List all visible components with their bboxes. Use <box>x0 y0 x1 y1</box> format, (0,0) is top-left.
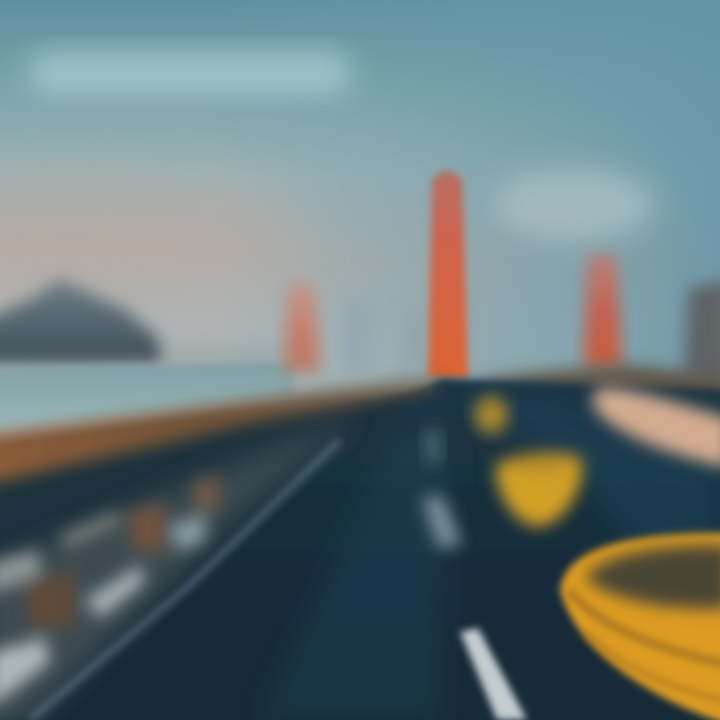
road edge line <box>30 440 340 720</box>
gold ring: middle <box>496 453 582 527</box>
sky background <box>0 0 720 510</box>
gold ring: small far <box>474 396 508 434</box>
bridge tower: left <box>284 282 320 372</box>
bridge tower: centre <box>428 171 468 378</box>
distant city skyline <box>0 280 425 370</box>
lane markings <box>422 428 527 720</box>
beige curved rail right <box>592 388 720 468</box>
guard rail patches <box>0 477 220 708</box>
cloud: right <box>495 169 655 241</box>
bridge tower: far right dark <box>684 280 720 390</box>
left roadside rail zone <box>0 415 360 720</box>
brown barrier <box>0 378 440 486</box>
bridge tower: right <box>584 255 622 368</box>
far bank right <box>470 365 720 420</box>
road surface <box>0 378 720 720</box>
cloud: upper left <box>30 52 350 94</box>
water <box>0 362 295 432</box>
left dark base under deck <box>0 384 450 720</box>
gold ring: large foreground <box>560 533 720 720</box>
